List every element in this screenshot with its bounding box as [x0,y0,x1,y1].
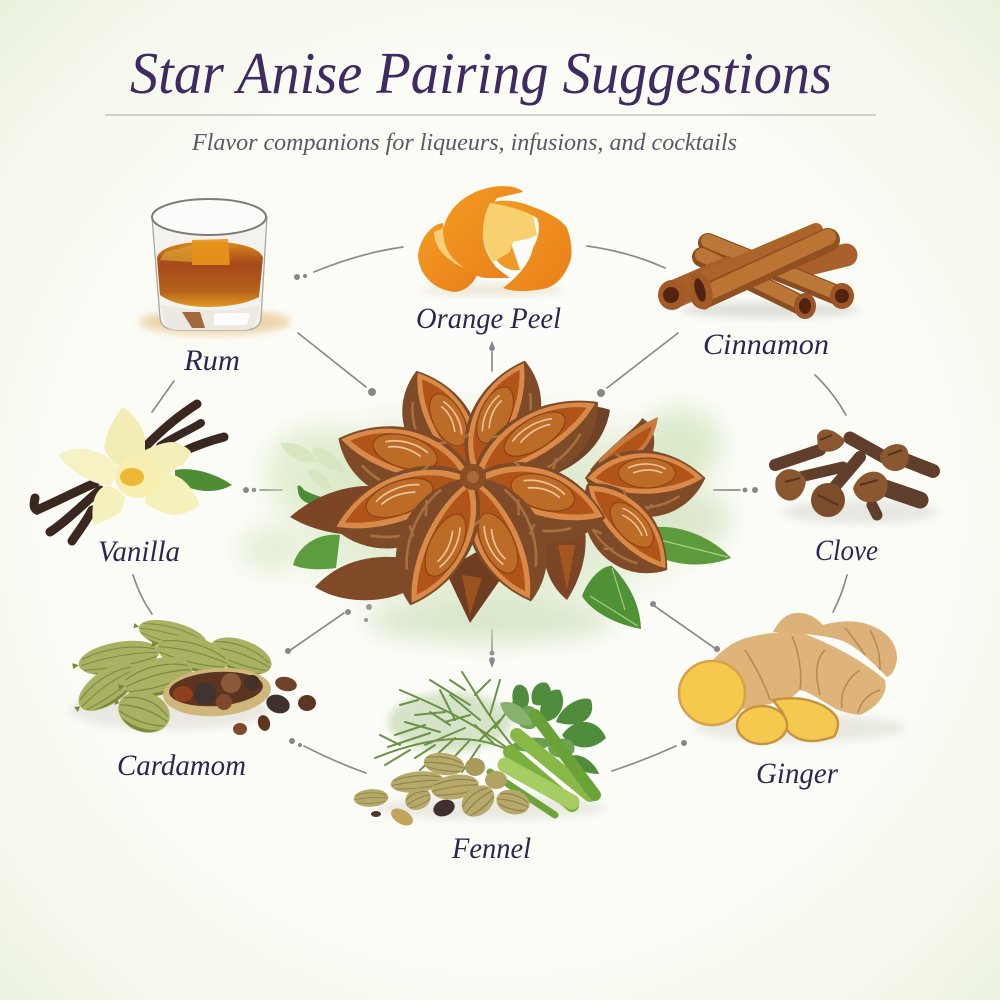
label: Clove: Clove [815,534,878,567]
item: cloves [775,429,938,524]
fennel seeds [353,750,532,829]
label: Orange Peel: Orange Peel [416,302,561,335]
title: Star Anise Pairing Suggestions [130,40,832,106]
label: Vanilla: Vanilla [98,535,180,568]
label: Cinnamon: Cinnamon [703,328,829,361]
item: ginger [679,613,905,744]
label: Cardamom: Cardamom [117,749,246,782]
item: rum glass [139,199,291,335]
green watercolor wash [238,385,735,644]
connector arrows [133,246,847,773]
item: orange peel [418,186,572,296]
central star pods [323,349,618,618]
subtitle: Flavor companions for liqueurs, infusions, and cocktails [191,130,737,156]
item: cardamom [66,612,316,740]
item: cinnamon sticks [658,230,860,319]
pale background leaves [280,442,346,490]
label: Rum: Rum [183,344,240,377]
central star anise illustration [238,349,735,644]
item: fennel [353,672,606,829]
back pods [290,406,610,623]
right star pods [560,417,705,595]
label: Fennel: Fennel [451,832,531,865]
fennel fronds [375,672,525,772]
label: Ginger: Ginger [756,757,838,790]
fennel stalks [490,715,595,815]
item: vanilla [34,404,232,541]
fennel leaves [500,682,606,774]
green leaves [293,486,731,629]
